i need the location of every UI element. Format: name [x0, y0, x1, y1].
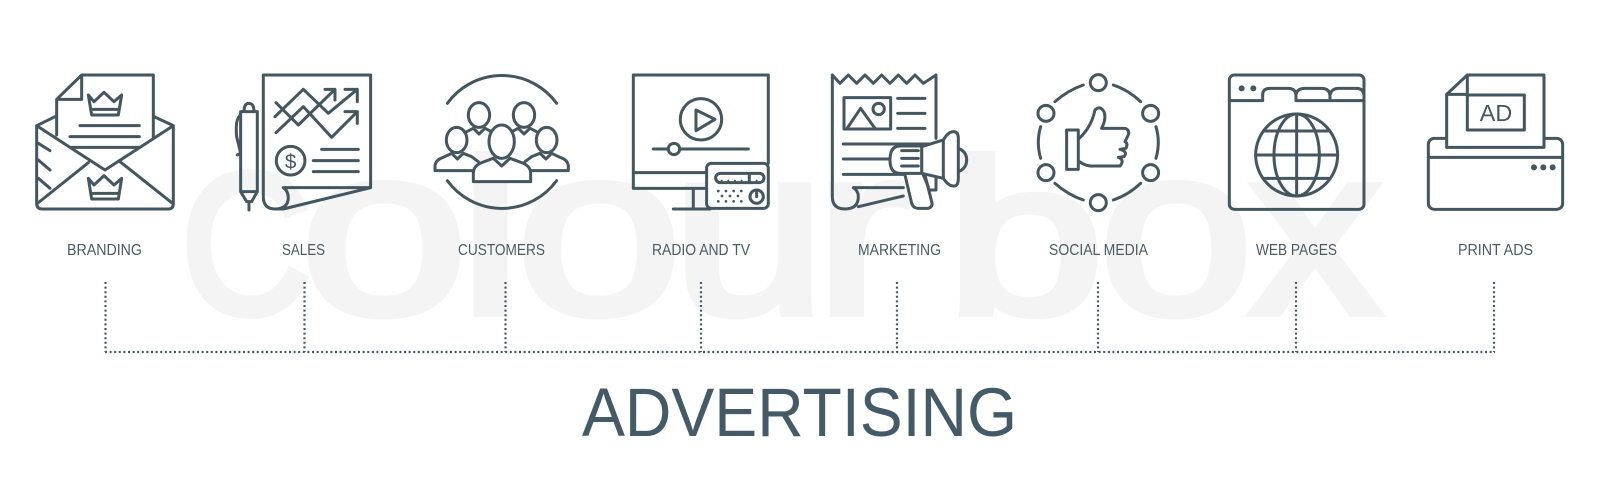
watermark: C [181, 133, 311, 356]
icon: sales document and pen [236, 75, 371, 210]
icon: social media thumbs up [1038, 75, 1159, 211]
icon: sales document and pen: $ [285, 150, 297, 173]
label: sales: SALES [282, 242, 325, 259]
label: social media: SOCIAL MEDIA [1049, 242, 1149, 259]
watermark: o [516, 96, 682, 364]
watermark: l [460, 117, 521, 360]
watermark: b [946, 117, 1104, 360]
icon: web pages browser with globe [1229, 75, 1364, 209]
title: ADVERTISING [582, 374, 1017, 451]
label: customers: CUSTOMERS [458, 242, 545, 259]
dotted connector [105, 282, 1495, 352]
watermark: u [672, 96, 826, 364]
watermark [181, 96, 1381, 364]
icon: marketing newspaper and megaphone [832, 75, 967, 209]
icon: branding envelope [37, 75, 173, 209]
label: radio and tv: RADIO AND TV [652, 242, 751, 259]
label: branding: BRANDING [67, 242, 142, 259]
label: print ads: PRINT ADS [1458, 242, 1533, 259]
icon: radio and tv [633, 75, 768, 209]
watermark: o [1099, 96, 1253, 364]
watermark: o [300, 96, 468, 364]
icon: print ads printer [1428, 75, 1563, 209]
label: web pages: WEB PAGES [1256, 242, 1337, 259]
icon: customers group [435, 76, 568, 208]
watermark: r [815, 96, 909, 364]
watermark: x [1250, 96, 1381, 364]
label: marketing: MARKETING [858, 242, 941, 259]
icon: print ads printer: AD [1480, 100, 1512, 126]
